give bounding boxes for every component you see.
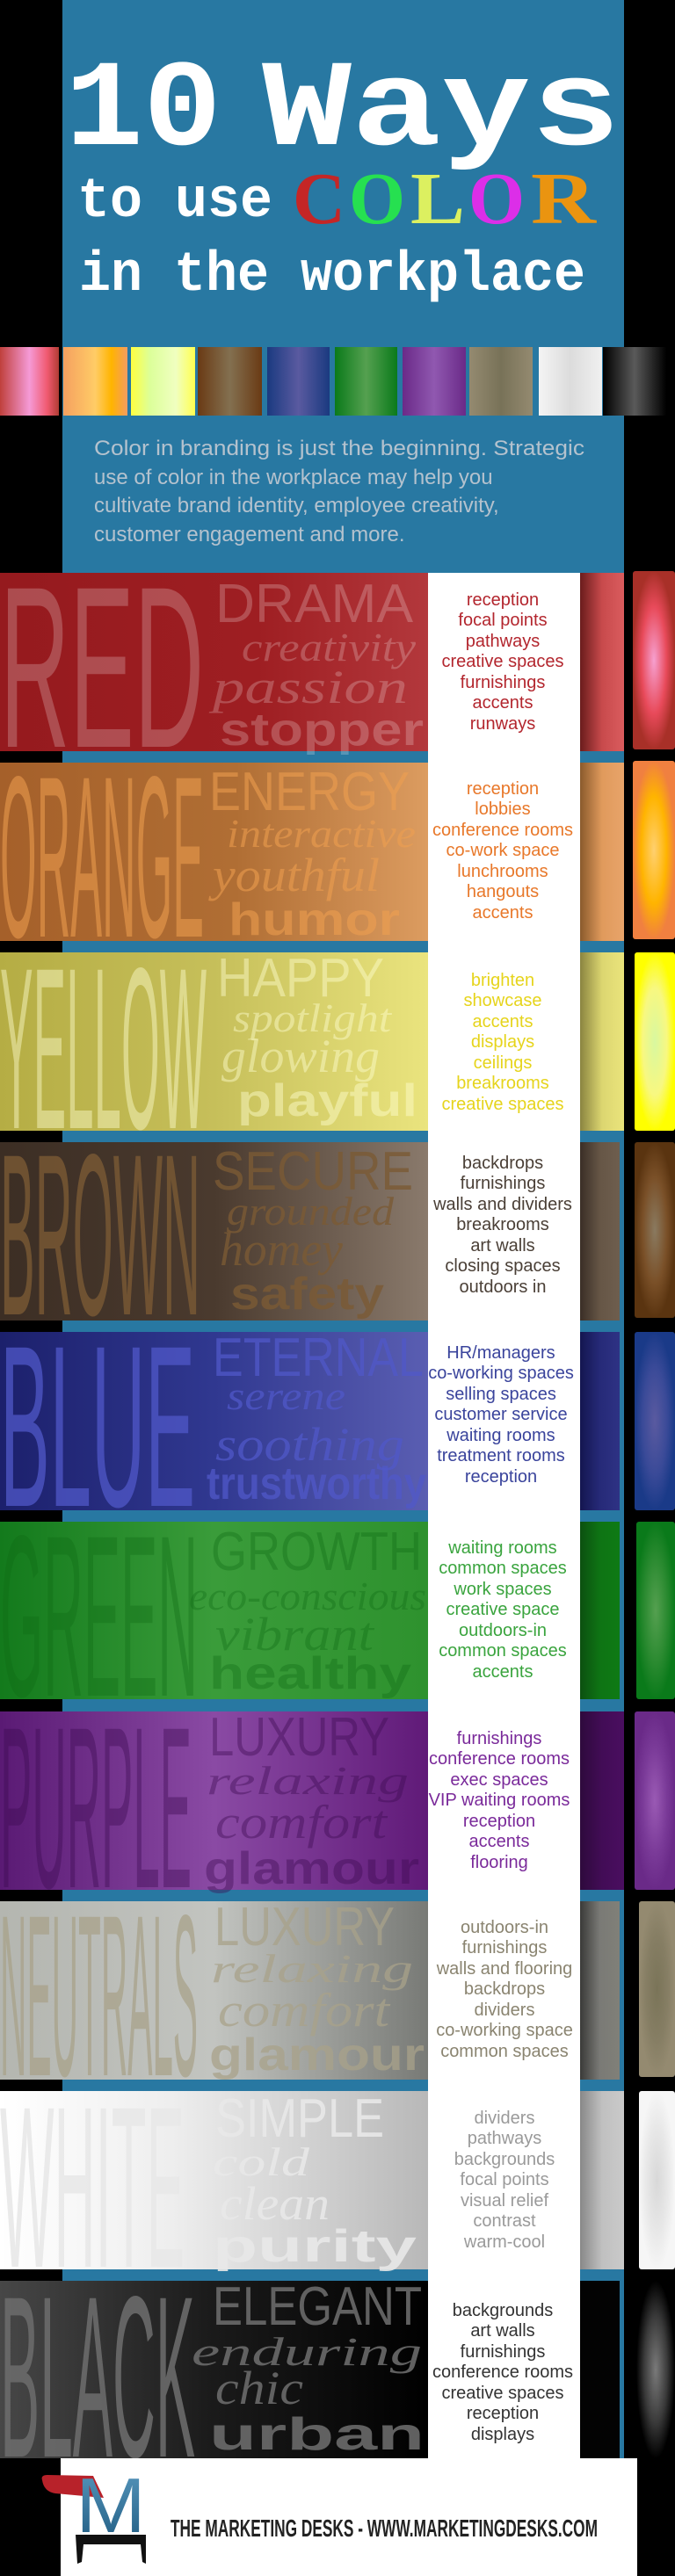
panel: orange: co-work space: [446, 841, 559, 860]
panel: yellow: showcase: [464, 991, 541, 1010]
panel: purple: glamour: [204, 1843, 419, 1894]
intro paragraph: cultivate brand identity, employee creativity,: [94, 494, 499, 517]
panel: yellow: displays: [471, 1032, 534, 1052]
panel: black: enduring: [192, 2329, 422, 2374]
panel: black: urban: [209, 2409, 425, 2460]
COLOR word: C: [293, 158, 345, 240]
panel: blue: ETERNAL: [213, 1328, 424, 1388]
panel: orange: ENERGY: [209, 762, 410, 822]
COLOR word: R: [531, 158, 598, 240]
panel: neutrals: comfort: [218, 1984, 391, 2037]
panel: brown: art walls: [470, 1236, 535, 1255]
panel: purple: furnishings: [457, 1729, 541, 1748]
panel: red: pathways: [466, 632, 540, 651]
COLOR word: O: [468, 158, 525, 240]
panel: red: creativity: [242, 625, 417, 669]
panel: purple: conference rooms: [429, 1749, 570, 1769]
panel: brown: backdrops: [462, 1154, 543, 1173]
panel: yellow: glowing: [221, 1030, 380, 1082]
panel: black: backgrounds: [453, 2301, 553, 2320]
panel: black: chic: [215, 2362, 303, 2414]
panel: black: furnishings: [461, 2342, 545, 2362]
panel: white: SIMPLE: [215, 2088, 384, 2149]
panel: neutrals: outdoors-in: [461, 1918, 548, 1937]
panel: blue: HR/managers: [446, 1343, 555, 1363]
panel: red: furnishings: [461, 673, 545, 692]
panel: green: eco-conscious: [189, 1574, 426, 1618]
color swatch strip: [0, 347, 666, 416]
panel: neutrals: LUXURY: [214, 1897, 395, 1957]
panel: blue: treatment rooms: [437, 1446, 565, 1465]
panel: brown: breakrooms: [456, 1215, 549, 1234]
panel: blue: trustworthy: [207, 1458, 426, 1509]
panel: purple: accents: [469, 1832, 529, 1851]
title: [65, 42, 621, 308]
panel: blue: soothing: [215, 1418, 404, 1471]
panel: orange: interactive: [227, 811, 416, 856]
panel: orange: accents: [473, 903, 533, 923]
panel: yellow: spotlight: [233, 995, 392, 1040]
icon: M logo: M: [76, 2462, 146, 2549]
panel: blue: waiting rooms: [446, 1426, 555, 1445]
panel: red: focal points: [458, 611, 548, 630]
panel: red: stopper: [220, 705, 424, 756]
panel: neutrals: furnishings: [462, 1938, 547, 1957]
title: Ways: [262, 42, 621, 182]
panel: white: contrast: [473, 2211, 536, 2231]
panel: yellow: ceilings: [474, 1053, 532, 1073]
panel: red: passion: [208, 661, 408, 713]
panel: black: reception: [467, 2404, 539, 2423]
COLOR word: O: [349, 158, 405, 240]
panel: black: creative spaces: [442, 2384, 563, 2403]
panel: neutrals: walls and flooring: [436, 1959, 572, 1979]
panel: orange: humor: [229, 894, 400, 945]
title: 10: [65, 42, 221, 182]
panel: black: displays: [471, 2425, 534, 2444]
panel: purple: relaxing: [207, 1758, 409, 1803]
panel: green: creative space: [446, 1600, 559, 1619]
panel: blue: customer service: [434, 1405, 568, 1424]
panel: blue: selling spaces: [446, 1385, 556, 1404]
panel: green: GROWTH: [211, 1522, 422, 1582]
panel: neutrals: common spaces: [440, 2042, 569, 2061]
panel: white: focal points: [460, 2170, 549, 2189]
panel: black: conference rooms: [432, 2363, 573, 2382]
title: in the workplace: [79, 244, 585, 308]
panel: purple: comfort: [215, 1796, 388, 1849]
panel: orange: reception: [467, 779, 539, 799]
panel: neutrals: relaxing: [211, 1946, 413, 1991]
panel: blue: reception: [465, 1467, 537, 1487]
panel: purple: VIP waiting rooms: [429, 1791, 570, 1810]
panel: red: accents: [473, 693, 533, 713]
title: to use: [77, 170, 272, 234]
intro paragraph: customer engagement and more.: [94, 523, 405, 546]
intro paragraph: [94, 437, 584, 546]
panel: blue: BLUE: [0, 1298, 195, 1555]
panel: white: purity: [213, 2221, 417, 2272]
panel: yellow: brighten: [471, 971, 534, 990]
panel: yellow: accents: [473, 1012, 533, 1031]
panel: yellow: playful: [237, 1075, 417, 1126]
panel: neutrals: glamour: [209, 2030, 425, 2080]
panel: black: art walls: [470, 2321, 535, 2341]
panel: white: pathways: [468, 2129, 541, 2148]
panel: orange: lobbies: [475, 800, 531, 819]
panel: green: common spaces: [439, 1641, 567, 1661]
panel: brown: walls and dividers: [432, 1195, 572, 1214]
panel: yellow: HAPPY: [217, 948, 384, 1009]
panel: red: reception: [467, 590, 539, 610]
panel: red: RED: [0, 539, 204, 796]
panel: brown: outdoors in: [460, 1277, 546, 1297]
panel: white: warm-cool: [463, 2232, 545, 2252]
panel: red: runways: [470, 714, 535, 734]
panel: brown: closing spaces: [445, 1256, 561, 1276]
panel: brown: safety: [230, 1269, 384, 1320]
panel: neutrals: backdrops: [464, 1979, 545, 1999]
panel: blue: serene: [227, 1373, 345, 1418]
panel: green: accents: [473, 1662, 533, 1682]
panel: neutrals: dividers: [475, 2001, 534, 2020]
panel: green: outdoors-in: [459, 1621, 547, 1640]
panel: white: backgrounds: [454, 2150, 555, 2169]
panel: red: DRAMA: [215, 574, 414, 634]
panel: white: cold: [213, 2139, 310, 2184]
intro paragraph: use of color in the workplace may help you: [94, 466, 493, 489]
panel: yellow: breakrooms: [456, 1074, 549, 1093]
panel: white: dividers: [475, 2109, 534, 2128]
panel: white: clean: [220, 2177, 330, 2230]
panel: purple: reception: [463, 1812, 535, 1831]
panel: green: work spaces: [453, 1580, 552, 1599]
panel: green: waiting rooms: [447, 1538, 557, 1558]
COLOR word: [293, 158, 598, 240]
panel: orange: conference rooms: [432, 821, 573, 840]
COLOR word: L: [410, 158, 465, 240]
intro paragraph: Color in branding is just the beginning. Strategic: [94, 437, 584, 460]
footer: [42, 2458, 637, 2576]
panel: purple: flooring: [470, 1853, 528, 1872]
panel: orange: youthful: [208, 849, 380, 901]
panel: brown: furnishings: [461, 1174, 545, 1193]
panel: neutrals: co-working space: [436, 2021, 573, 2040]
panel: white: visual relief: [461, 2191, 548, 2211]
panel: purple: exec spaces: [450, 1770, 548, 1790]
panel: brown: SECURE: [213, 1141, 413, 1202]
panel: yellow: creative spaces: [442, 1095, 563, 1114]
panel: orange: lunchrooms: [457, 862, 548, 881]
panel: blue: co-working spaces: [428, 1364, 574, 1383]
white list column: [428, 573, 580, 2458]
panel: green: vibrant: [215, 1608, 375, 1661]
panel: orange: hangouts: [467, 882, 539, 901]
icon: M logo: [42, 2462, 146, 2564]
panel: brown: grounded: [227, 1189, 395, 1234]
panel: green: common spaces: [439, 1559, 567, 1578]
panel: brown: homey: [220, 1223, 343, 1276]
panel: red: creative spaces: [442, 652, 563, 671]
panel: black: ELEGANT: [213, 2276, 422, 2337]
panel: purple: LUXURY: [209, 1707, 389, 1768]
panel: green: healthy: [209, 1648, 411, 1699]
